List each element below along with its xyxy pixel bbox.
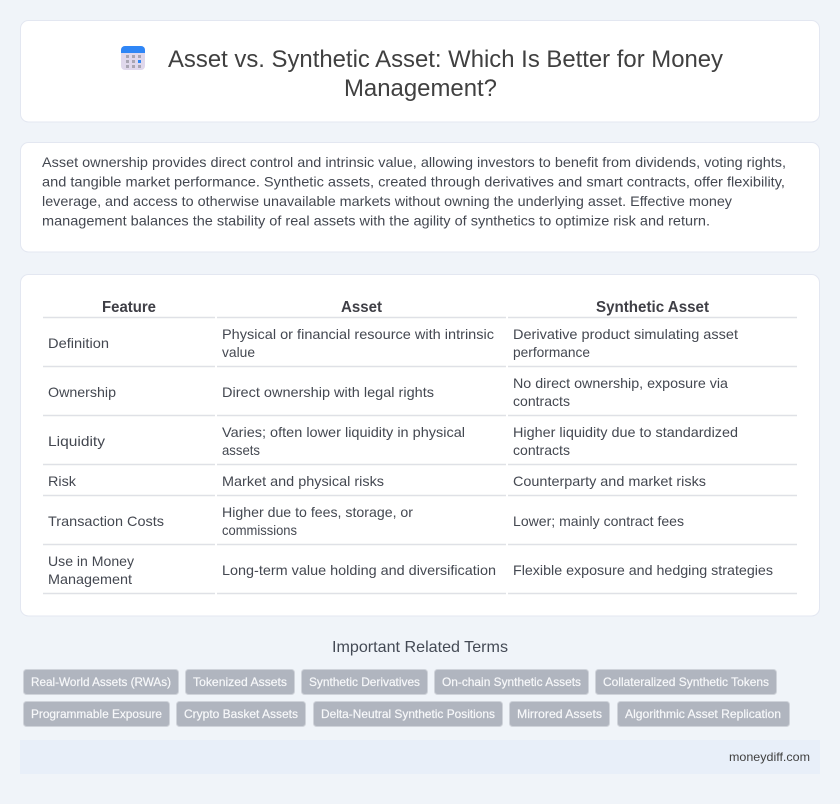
row: risk: Counterparty and market risks <box>513 473 706 489</box>
icon: calendar <box>121 46 145 70</box>
row: definition: performance <box>513 344 590 360</box>
related term tags: Crypto Basket Assets <box>184 707 298 721</box>
panel: title <box>20 20 820 122</box>
row: ownership: contracts <box>513 393 570 409</box>
related term tags: Mirrored Assets <box>517 707 602 721</box>
row: definition: Derivative product simulating asset <box>513 326 738 342</box>
heading: Management? <box>344 75 497 102</box>
text block: introduction: management balances the stability of real assets with the agility of synthetics to optimize risk and return. <box>42 212 710 228</box>
row: definition: Physical or financial resource with intrinsic <box>222 326 494 342</box>
footer <box>20 740 820 774</box>
row: liquidity: Varies; often lower liquidity in physical <box>222 424 465 440</box>
row: transaction costs: commissions <box>222 522 297 538</box>
row: use in money management: Use in Money <box>48 553 134 569</box>
row: liquidity <box>48 424 738 458</box>
row: use in money management: Flexible exposure and hedging strategies <box>513 562 773 578</box>
row: risk: Market and physical risks <box>222 473 384 489</box>
related term tags <box>24 670 790 726</box>
row: definition <box>48 326 738 360</box>
heading <box>168 46 723 102</box>
related term tags: Programmable Exposure <box>31 707 162 721</box>
row: definition: value <box>222 344 255 360</box>
row: transaction costs <box>48 504 684 538</box>
row: risk <box>48 473 706 489</box>
heading: related terms: Important Related Terms <box>332 639 508 656</box>
row: use in money management: Management <box>48 571 132 587</box>
text block: introduction: leverage, and access to otherwise unavailable markets without owning the underlying asset. Effective money <box>42 193 732 209</box>
related term tags: Tokenized Assets <box>193 675 287 689</box>
row: ownership: No direct ownership, exposure via <box>513 375 728 391</box>
footer: moneydiff.com <box>729 750 810 764</box>
row: liquidity: assets <box>222 442 260 458</box>
panel: comparison table <box>20 274 820 616</box>
row: liquidity: contracts <box>513 442 570 458</box>
row: ownership <box>48 375 728 409</box>
heading: Asset vs. Synthetic Asset: Which Is Better for Money <box>168 46 723 73</box>
text block: introduction: Asset ownership provides direct control and intrinsic value, allowing investors to benefit from dividends, voting rights, <box>42 154 786 170</box>
table header: Feature <box>102 299 156 316</box>
related term tags: On-chain Synthetic Assets <box>442 675 581 689</box>
panel: introduction <box>20 142 820 252</box>
row: use in money management: Long-term value holding and diversification <box>222 562 496 578</box>
row: use in money management <box>48 553 773 587</box>
row: definition: Definition <box>48 335 109 351</box>
table header: Asset <box>341 299 383 316</box>
table header <box>102 299 710 316</box>
related term tags: Collateralized Synthetic Tokens <box>603 675 769 689</box>
related term tags: Real-World Assets (RWAs) <box>31 675 171 689</box>
row: risk: Risk <box>48 473 77 489</box>
text block: introduction: and tangible market performance. Synthetic assets, created through derivatives and smart contracts, offer flexibility, <box>42 174 785 190</box>
related term tags: Algorithmic Asset Replication <box>625 707 781 721</box>
row: transaction costs: Lower; mainly contract fees <box>513 513 684 529</box>
related term tags: Synthetic Derivatives <box>309 675 420 689</box>
related term tags: Delta-Neutral Synthetic Positions <box>321 707 495 721</box>
table header: Synthetic Asset <box>596 299 710 316</box>
row: ownership: Direct ownership with legal rights <box>222 384 434 400</box>
row: liquidity: Liquidity <box>48 433 105 449</box>
row: liquidity: Higher liquidity due to standardized <box>513 424 738 440</box>
row: ownership: Ownership <box>48 384 116 400</box>
row: transaction costs: Transaction Costs <box>48 513 164 529</box>
text block: introduction <box>42 154 786 228</box>
row: transaction costs: Higher due to fees, storage, or <box>222 504 413 520</box>
